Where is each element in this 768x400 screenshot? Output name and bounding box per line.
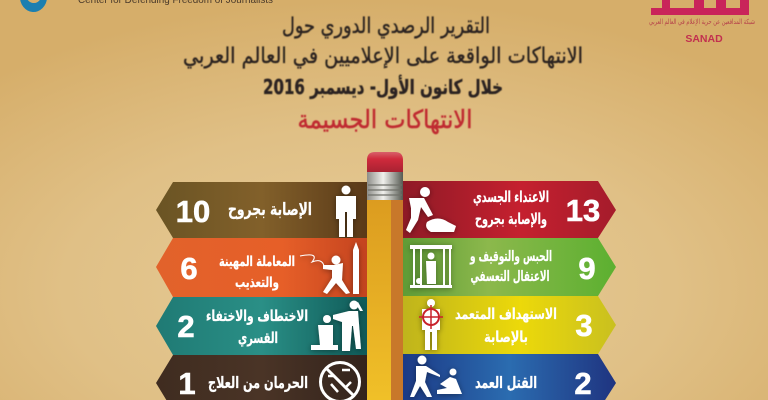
section heading: الانتهاكات الجسيمة xyxy=(298,105,472,135)
icon: no medicine xyxy=(320,362,360,400)
logo: SANAD xyxy=(649,0,755,45)
icon: captor and kneeling captive xyxy=(311,300,363,351)
logo mark xyxy=(651,0,749,15)
banner xyxy=(156,182,367,238)
icon: whipping figure xyxy=(300,242,359,294)
icon: prisoner behind bars xyxy=(410,245,452,288)
pencil body xyxy=(367,200,403,400)
label line 2: الاعتقال التعسفي xyxy=(470,269,550,285)
label: الحرمان من العلاج xyxy=(208,373,308,392)
icon: wounded person xyxy=(336,186,356,237)
icon: assault xyxy=(406,187,456,233)
banner xyxy=(403,296,616,354)
count: 1 xyxy=(178,366,196,400)
label: الإصابة بجروح xyxy=(228,200,312,220)
label xyxy=(469,249,552,285)
label line 1: الحبس والتوقيف و xyxy=(469,249,552,265)
label line 1: الاستهداف المتعمد xyxy=(455,305,557,323)
count: 13 xyxy=(566,193,600,228)
label xyxy=(219,254,295,291)
label line 2: القسري xyxy=(238,329,278,348)
icon: person in crosshair xyxy=(419,299,443,350)
count: 2 xyxy=(574,366,592,400)
logo: Center for Defending Freedom of Journalists xyxy=(20,0,273,12)
panel: abduction xyxy=(156,297,367,355)
banner xyxy=(403,354,616,400)
label line 2: والإصابة بجروح xyxy=(475,210,547,228)
title line 2: الانتهاكات الواقعة على الإعلاميين في العالم العربي xyxy=(183,44,583,69)
label xyxy=(206,307,308,348)
panel: injuries xyxy=(156,182,367,238)
pencil ferrule xyxy=(367,172,403,200)
count: 2 xyxy=(177,309,195,344)
title line 1: التقرير الرصدي الدوري حول xyxy=(282,14,490,39)
label line 1: الاختطاف والاختفاء xyxy=(206,307,308,325)
ferrule ridges xyxy=(368,185,402,195)
banner xyxy=(403,238,616,296)
count: 9 xyxy=(578,251,596,286)
panel: deliberate killing xyxy=(403,354,616,400)
count: 6 xyxy=(180,251,198,286)
pencil shaded facet xyxy=(391,200,403,400)
title line 3: خلال كانون الأول- ديسمبر 2016 xyxy=(263,74,503,99)
banner xyxy=(156,238,367,297)
label line 1: الاعتداء الجسدي xyxy=(473,188,549,207)
banner xyxy=(156,297,367,355)
panel: physical assault xyxy=(403,181,616,238)
pencil eraser xyxy=(367,152,403,172)
label: القتل العمد xyxy=(475,373,537,392)
panel: deliberate targeting xyxy=(403,296,616,354)
label line 2: بالإصابة xyxy=(484,328,528,346)
label xyxy=(455,305,557,346)
label line 1: المعاملة المهينة xyxy=(219,254,295,270)
count: 3 xyxy=(575,308,593,343)
banner xyxy=(156,355,367,400)
icon: shooter and victim xyxy=(410,356,462,397)
panel: torture xyxy=(156,238,367,297)
count: 10 xyxy=(176,194,210,229)
label line 2: والتعذيب xyxy=(235,275,279,291)
banner xyxy=(403,181,616,238)
icon: blue ring xyxy=(20,0,47,12)
logo wordmark: SANAD xyxy=(685,33,723,45)
panel: denial of treatment xyxy=(156,355,367,400)
panel: detention xyxy=(403,238,616,296)
title block xyxy=(183,14,583,135)
label xyxy=(473,188,549,228)
pencil xyxy=(367,152,403,400)
